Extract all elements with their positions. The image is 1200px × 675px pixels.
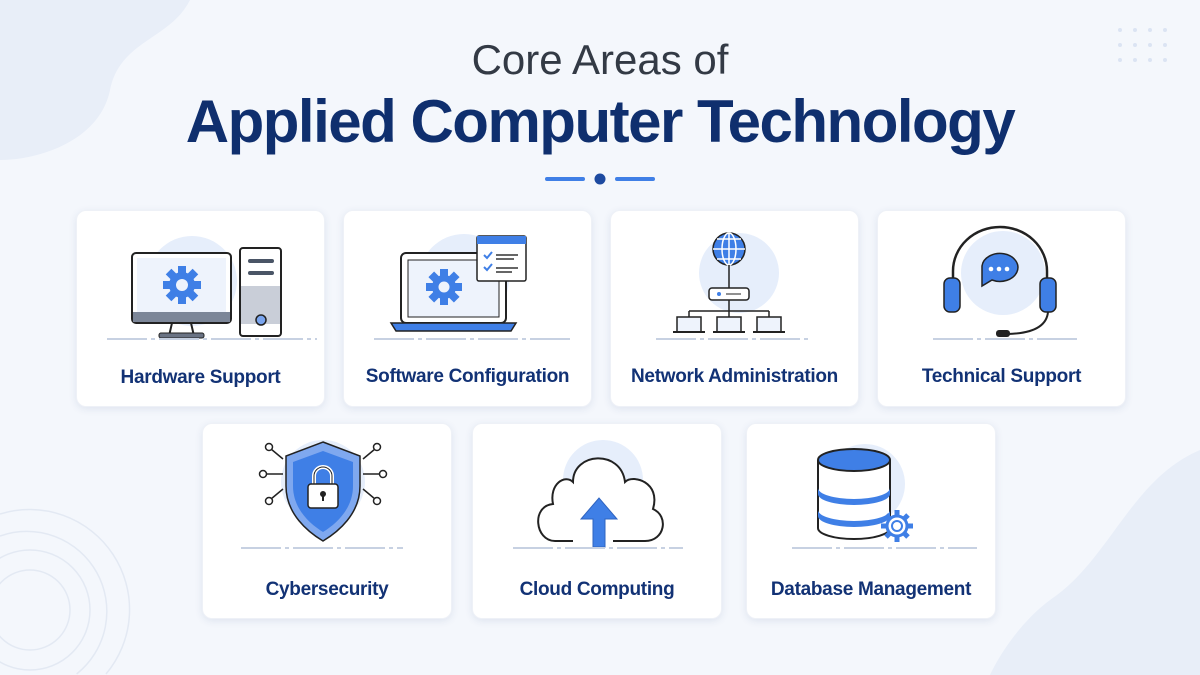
icon: network tree — [656, 232, 808, 340]
panel: cloud computing: Cloud Computing — [520, 579, 674, 600]
divider — [545, 174, 655, 184]
panel: software configuration — [343, 210, 592, 407]
panel: network administration: Network Administration — [631, 366, 838, 387]
panel: cybersecurity — [202, 423, 452, 619]
panel: software configuration: Software Configuration — [366, 366, 569, 387]
panel: network administration — [610, 210, 859, 407]
icon: desktop computer — [107, 236, 317, 340]
title: Core Areas of — [472, 36, 728, 83]
title — [186, 36, 1016, 155]
panel: cybersecurity: Cybersecurity — [266, 579, 388, 600]
title: Applied Computer Technology — [186, 88, 1014, 155]
icon: headset with chat — [933, 226, 1077, 340]
panel: database management: Database Management — [771, 579, 971, 600]
icon: database with gear — [792, 444, 977, 549]
panel: technical support: Technical Support — [922, 366, 1081, 387]
panel: database management — [746, 423, 996, 619]
icon: cloud upload — [513, 440, 683, 549]
panel: cloud computing — [472, 423, 722, 619]
panel: hardware support — [76, 210, 325, 407]
icon: laptop with checklist — [374, 234, 570, 340]
panel: technical support — [877, 210, 1126, 407]
panel: hardware support: Hardware Support — [121, 367, 280, 388]
icon: shield with lock — [241, 440, 403, 549]
